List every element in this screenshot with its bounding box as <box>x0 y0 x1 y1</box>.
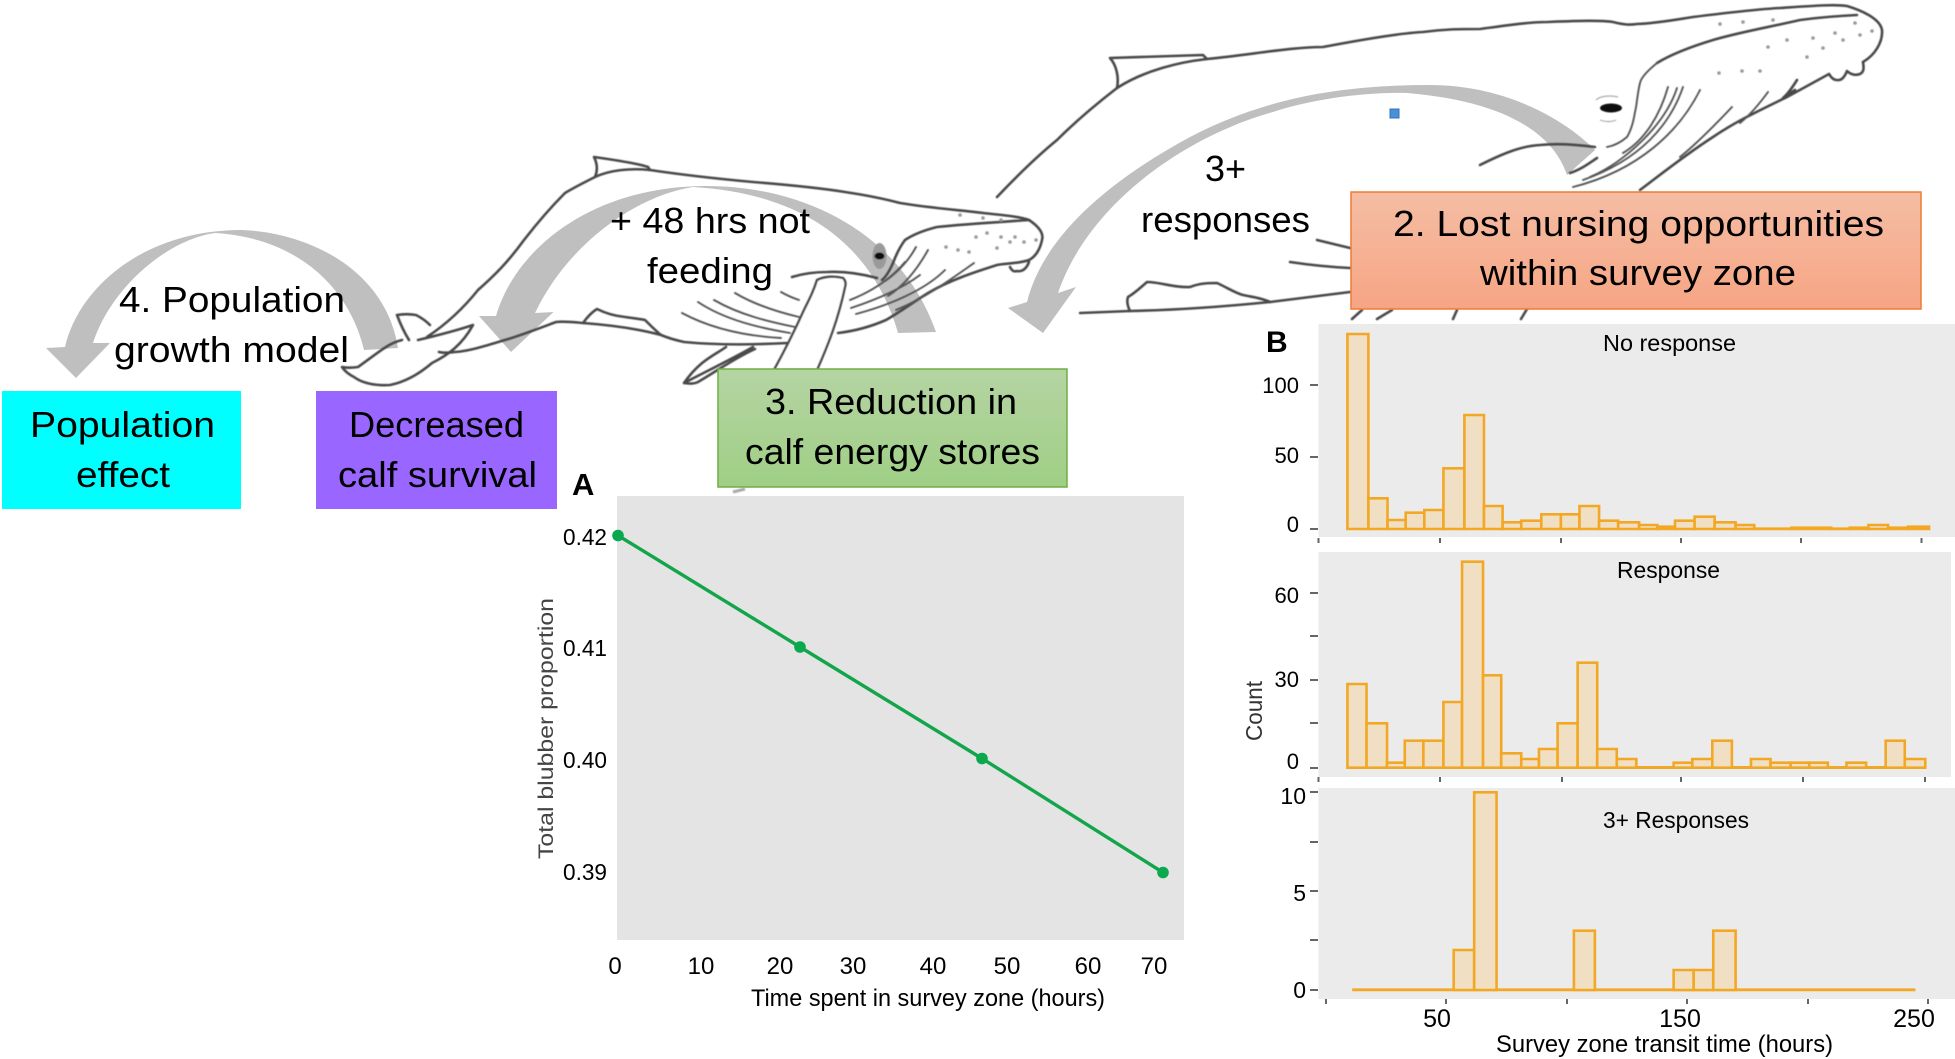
x axis labels <box>608 953 1167 980</box>
panel label B: B <box>1266 326 1288 359</box>
y axis labels <box>563 524 607 885</box>
box: decreased calf survival: calf survival <box>338 454 537 495</box>
box: population effect <box>2 391 241 509</box>
axis ticks and labels: 60 <box>1275 583 1299 608</box>
line series <box>612 530 1169 878</box>
box: population effect: Population <box>30 404 215 445</box>
axis ticks and labels: 100 <box>1262 373 1299 398</box>
panel label A: A <box>572 467 594 502</box>
box: reduction in calf energy stores: calf energy stores <box>745 431 1040 472</box>
illustration: calf whale <box>342 157 1042 492</box>
label: population growth model: 4. Population <box>119 279 345 320</box>
box: decreased calf survival: Decreased <box>349 404 524 445</box>
label: 3+ responses: responses <box>1141 199 1310 240</box>
label: 3+ responses: 3+ <box>1205 148 1246 189</box>
axis ticks and labels <box>1280 783 1935 1033</box>
label: 48 hours not feeding: + 48 hrs not <box>610 200 810 241</box>
arrow: energy stores to calf survival <box>479 186 936 352</box>
box: lost nursing opportunities: 2. Lost nursing opportunities <box>1393 203 1884 244</box>
x axis labels: 70 <box>1141 953 1167 980</box>
chart B panel: no response histogram: No response <box>1603 330 1736 356</box>
chart A: blubber proportion vs time <box>535 496 1184 1012</box>
illustration: adult whale <box>997 5 1882 319</box>
axis ticks and labels: 50 <box>1423 1005 1451 1033</box>
x axis labels: 30 <box>840 953 866 980</box>
chart B panel: no response histogram <box>1262 324 1955 543</box>
box: reduction in calf energy stores <box>718 369 1067 487</box>
marker: blue selection handle <box>1390 109 1399 118</box>
y axis labels: 0.39 <box>563 859 607 885</box>
axis ticks and labels: 30 <box>1275 667 1299 692</box>
box: lost nursing opportunities: within survey zone <box>1479 252 1796 293</box>
axis ticks and labels: 0 <box>1287 512 1299 537</box>
box: lost nursing opportunities <box>1351 192 1921 309</box>
axis ticks and labels: 0 <box>1293 977 1306 1003</box>
box: population effect: effect <box>76 454 170 495</box>
arrow: nursing to energy stores <box>1008 85 1595 333</box>
label: 3+ responses <box>1141 148 1310 240</box>
axis ticks and labels: 0 <box>1287 749 1299 774</box>
x axis labels: 0 <box>608 953 622 980</box>
label: 48 hours not feeding <box>610 200 810 291</box>
axis ticks and labels <box>1262 373 1922 543</box>
axis ticks and labels: 250 <box>1893 1005 1935 1033</box>
x axis labels: 60 <box>1075 953 1101 980</box>
box: reduction in calf energy stores: 3. Reduction in <box>765 381 1017 422</box>
box: decreased calf survival <box>316 391 557 509</box>
axis ticks and labels: 5 <box>1293 880 1306 906</box>
axis ticks and labels: 10 <box>1280 783 1306 809</box>
x axis labels: 10 <box>688 953 714 980</box>
chart B x axis title: Survey zone transit time (hours) <box>1496 1031 1833 1058</box>
chart B panel: response histogram <box>1275 552 1951 782</box>
bars <box>1347 334 1929 529</box>
y axis labels: 0.41 <box>563 635 607 661</box>
x axis labels: 40 <box>920 953 946 980</box>
y axis labels: 0.40 <box>563 747 607 773</box>
axis ticks and labels <box>1275 583 1925 782</box>
label: 48 hours not feeding: feeding <box>647 250 773 291</box>
y axis title: Total blubber proportion <box>535 598 558 859</box>
y axis labels: 0.42 <box>563 524 607 550</box>
x axis labels: 20 <box>767 953 793 980</box>
bars <box>1347 562 1925 768</box>
label: population growth model: growth model <box>114 329 349 370</box>
x axis labels: 50 <box>994 953 1020 980</box>
x axis title: Time spent in survey zone (hours) <box>751 985 1105 1012</box>
arrow: calf survival to population effect <box>46 230 398 378</box>
label: population growth model <box>114 279 349 370</box>
axis ticks and labels: 150 <box>1659 1005 1701 1033</box>
chart B panel: response histogram: Response <box>1617 557 1720 583</box>
chart B panel: 3+ responses histogram: 3+ Responses <box>1603 807 1749 833</box>
chart B y axis title: Count <box>1241 680 1267 741</box>
chart B panel: 3+ responses histogram <box>1280 783 1955 1033</box>
bars <box>1353 792 1914 990</box>
axis ticks and labels: 50 <box>1275 443 1299 468</box>
